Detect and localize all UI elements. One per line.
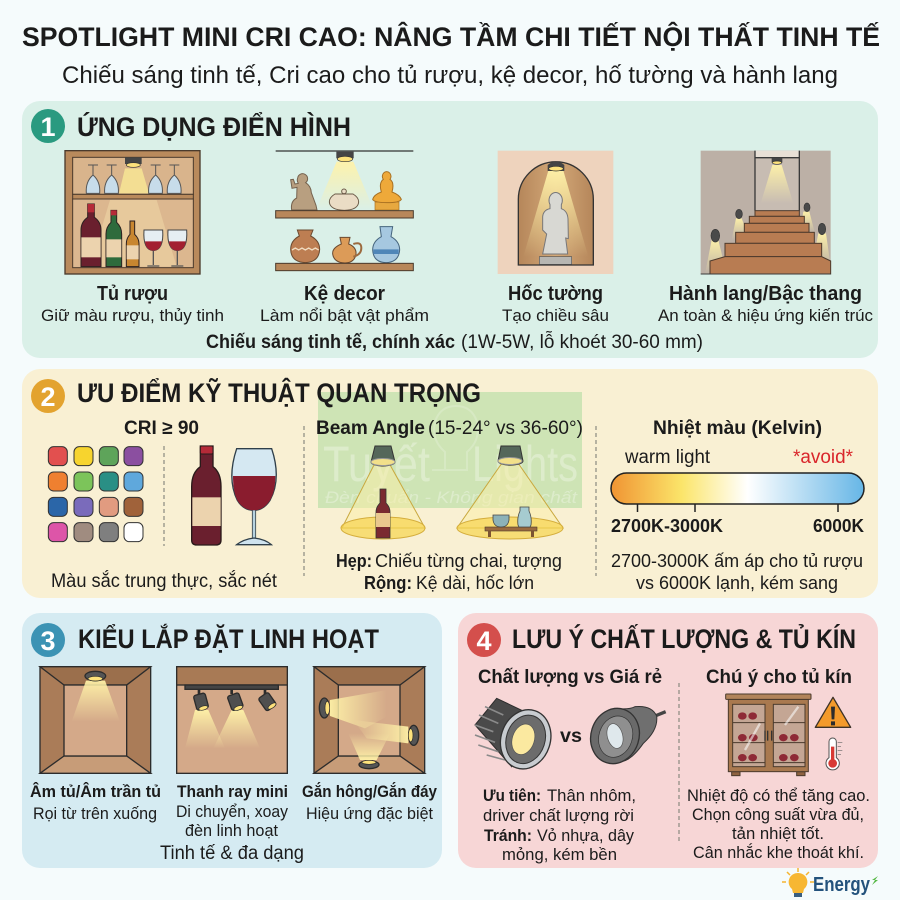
label: Kệ decor: Kệ decor [304,283,385,305]
heading: Chất lượng vs Giá rẻ: Chất lượng vs Giá rẻ [478,667,662,688]
panel: ứng dụng điển hình [22,101,878,358]
icon: warning triangle [815,697,851,727]
label: Thanh ray mini: Thanh ray mini [177,782,288,801]
text: beam notes [336,551,562,593]
label: Gắn hông/Gắn đáy: Gắn hông/Gắn đáy [302,782,437,801]
label: 2700K-3000K: 2700K-3000K [611,516,723,536]
text: kelvin note: vs 6000K lạnh, kém sang [636,572,838,593]
text: quality advice [483,786,636,864]
icon: hallway stairs with wall lights [701,151,831,274]
summary line: panel 1 [206,331,703,353]
text: cabinet advice: Chọn công suất vừa đủ, [692,805,864,824]
text: Hốc tường description: Tạo chiều sâu [502,306,609,325]
icon: narrow beam [341,446,425,539]
text: Gắn hông description: Hiệu ứng đặc biệt [306,804,433,823]
label: Tủ rượu: Tủ rượu [97,283,168,305]
panel: lưu ý chất lượng [458,613,878,868]
text: beam notes: Rộng: [364,573,412,593]
section 1 number badge: 1 [40,112,56,142]
heading: Beam Angle: Beam Angle [316,418,425,439]
text: Thanh ray description: đèn linh hoạt [185,821,278,840]
icon: colour swatches [48,447,143,542]
label: Hốc tường: Hốc tường [508,283,603,305]
label: Âm tủ/Âm trần tủ: Âm tủ/Âm trần tủ [30,782,161,801]
text: quality advice: Ưu tiên: [483,786,541,805]
watermark [318,392,582,508]
section 2 number badge [31,379,65,413]
text: kelvin note [611,550,863,593]
text: quality advice: Tránh: [484,826,532,845]
text: quality advice: mỏng, kém bền [502,845,617,864]
text: Âm tủ description: Rọi từ trên xuống [33,804,157,823]
text: Hành lang description: An toàn & hiệu ứng kiến trúc [658,306,873,325]
icon: cheap plastic lamp [584,702,666,770]
label: Hành lang/Bậc thang: Hành lang/Bậc thang [669,283,862,305]
label: warm light: warm light [624,447,711,468]
text: Tủ rượu description: Giữ màu rượu, thủy tinh [41,306,224,325]
section 4 number badge [467,623,501,657]
title: SPOTLIGHT MINI CRI CAO: NÂNG TẦM CHI TIẾT NỘI THẤT TINH TẾ [22,21,880,52]
icon: wall niche with statue [498,151,613,274]
text: kelvin note: 2700-3000K ấm áp cho tủ rượu [611,550,863,571]
panel: ưu điểm kỹ thuật [22,369,878,598]
heading: CRI: CRI ≥ 90 [124,418,199,439]
label: avoid: *avoid* [793,447,854,468]
text: cabinet advice: Nhiệt độ có thể tăng cao. [687,786,870,805]
text: cabinet advice: tản nhiệt tốt. [732,824,824,843]
label: 6000K: 6000K [813,516,864,536]
text: quality advice: driver chất lượng rời [483,806,634,825]
icon: side and bottom mount [314,667,425,773]
section 4 number badge: 4 [476,626,492,656]
text: cabinet advice: Cân nhắc khe thoát khí. [693,843,864,862]
section 3 heading: KIỂU LẮP ĐẶT LINH HOẠT [78,623,379,654]
section 3 number badge [31,623,65,657]
watermark: Tuyết [323,436,430,492]
text: beam notes: Chiếu từng chai, tượng [375,551,562,571]
text: beam notes: Hẹp: [336,551,372,571]
text: quality advice: Thân nhôm, [547,786,636,805]
section 1 heading: ỨNG DỤNG ĐIỂN HÌNH [77,111,351,142]
subtitle: Chiếu sáng tinh tế, Cri cao cho tủ rượu, kệ decor, hố tường và hành lang [62,62,838,89]
heading: Beam Angle: (15-24° vs 36-60°) [428,418,583,439]
text: CRI note: Màu sắc trung thực, sắc nét [51,570,278,592]
panel: kiểu lắp đặt [22,613,442,868]
watermark: Đèn chuẩn - Không gian chất [325,488,578,507]
icon: decor shelves [276,151,413,271]
text: Kệ decor description: Làm nổi bật vật phẩm [260,306,429,325]
summary line: panel 1: Chiếu sáng tinh tế, chính xác [206,332,455,353]
icon: mini track lights [177,667,287,773]
logo: Energy: Energy [813,874,871,896]
text: Thanh ray description [176,802,288,840]
icon: wine cabinet [65,151,200,274]
summary line: panel 3: Tinh tế & đa dạng [160,843,304,864]
watermark: Lights [472,436,578,492]
heading: Nhiệt màu: Nhiệt màu (Kelvin) [653,418,822,439]
section 1 number badge [31,109,65,143]
label: vs: vs [560,726,582,747]
icon: closed wine cabinet [726,694,811,776]
heading: Chú ý cho tủ kín: Chú ý cho tủ kín [706,667,852,688]
heading: Beam Angle [316,418,583,439]
text: cabinet advice [687,786,870,862]
text: Thanh ray description: Di chuyển, xoay [176,802,288,821]
icon: wine bottle and glass [192,446,276,545]
summary line: panel 1: (1W-5W, lỗ khoét 30-60 mm) [461,331,703,353]
icon: quality aluminium lamp [475,698,558,775]
section 3 number badge: 3 [40,626,56,656]
icon: thermometer [826,738,842,770]
text: quality advice: Vỏ nhựa, dây [537,826,634,845]
section 2 number badge: 2 [40,382,56,412]
logo: Energy [782,868,878,897]
icon: wide beam [457,446,563,539]
text: beam notes: Kệ dài, hốc lớn [416,573,534,593]
chart: kelvin colour bar [611,473,864,512]
section 2 heading: ƯU ĐIỂM KỸ THUẬT QUAN TRỌNG [77,377,481,408]
icon: recessed ceiling mount [40,667,151,773]
